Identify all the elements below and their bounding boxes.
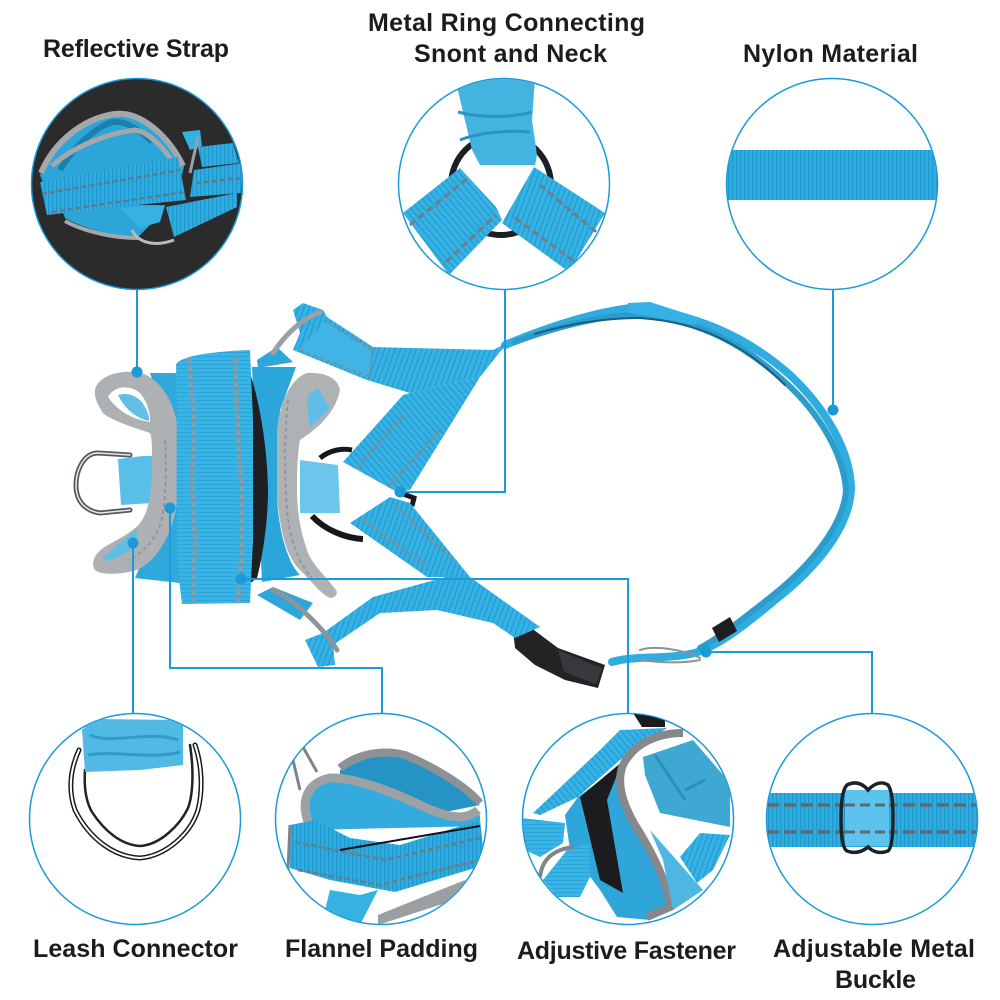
black metal ring — [312, 449, 414, 539]
inset: adjustable metal buckle — [766, 714, 979, 924]
connector lines — [133, 289, 872, 713]
black velcro strip — [248, 367, 268, 585]
title: Metal Ring Connecting Snont and Neck: Metal Ring Connecting — [368, 9, 645, 37]
upper metal ring — [273, 312, 320, 353]
inset: metal ring connecting — [398, 78, 610, 290]
title: Adjustable Metal Buckle: Buckle — [835, 966, 916, 994]
leash D-ring — [76, 453, 130, 513]
title: Flannel Padding: Flannel Padding — [285, 935, 478, 963]
title: Metal Ring Connecting Snont and Neck — [368, 9, 645, 68]
V strap upper — [343, 377, 480, 492]
blue loop under upper ring — [257, 347, 293, 368]
fleece tab right — [300, 460, 340, 513]
connector dots — [128, 366, 838, 658]
nose loop strap — [505, 302, 851, 662]
neoprene left — [135, 373, 180, 583]
inset: leash connector — [30, 714, 240, 924]
main wide strap — [176, 350, 253, 604]
inset: nylon material — [726, 78, 938, 290]
title: Leash Connector: Leash Connector — [33, 935, 238, 963]
V strap lower — [350, 497, 470, 577]
grey reflective piping left — [93, 372, 177, 574]
neoprene right — [252, 367, 300, 582]
inset: flannel padding — [276, 714, 486, 925]
title: Adjustable Metal Buckle: Adjustable Metal — [773, 935, 975, 963]
upper neck strap — [293, 303, 540, 393]
title: Reflective Strap: Reflective Strap — [43, 35, 229, 63]
main harness product — [76, 302, 851, 688]
title: Adjustable Metal Buckle — [773, 935, 975, 994]
title: Metal Ring Connecting Snont and Neck: Snont and Neck — [414, 40, 607, 68]
black slider and buckle — [513, 617, 737, 688]
lower metal ring — [273, 590, 337, 650]
inset: adjustive fastener — [522, 713, 734, 924]
title: Nylon Material: Nylon Material — [743, 40, 918, 68]
lower neck strap — [257, 575, 540, 667]
grey reflective piping right — [277, 373, 340, 598]
inset: reflective strap — [32, 78, 243, 290]
fleece tab left — [118, 456, 153, 505]
title: Adjustive Fastener: Adjustive Fastener — [517, 937, 736, 965]
